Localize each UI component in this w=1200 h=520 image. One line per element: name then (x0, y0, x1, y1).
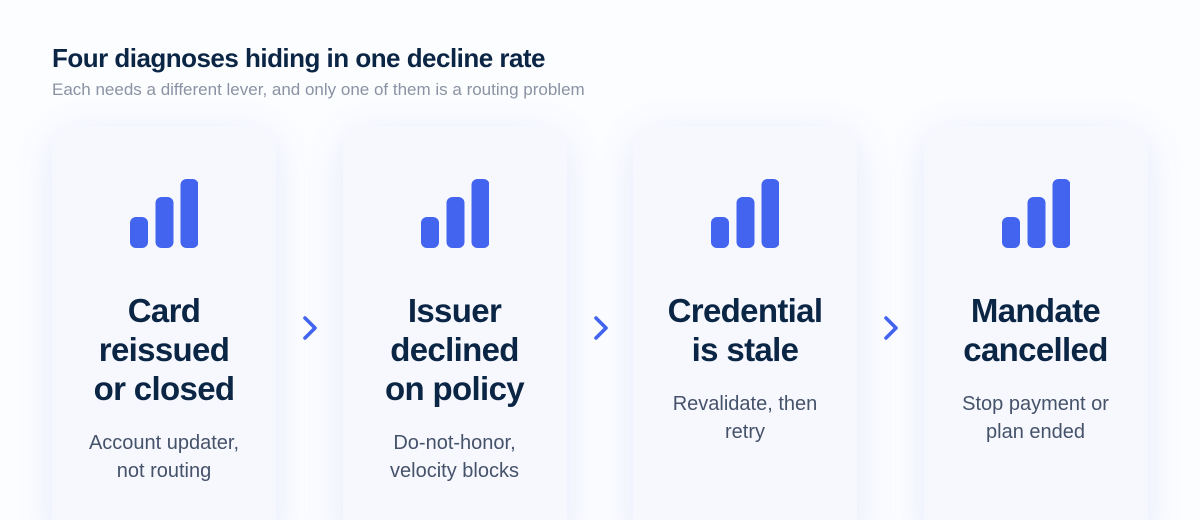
heading (668, 292, 822, 368)
heading: is stale (692, 331, 798, 368)
description: Revalidate, then (673, 392, 817, 414)
arrow (303, 316, 317, 340)
heading: cancelled (963, 331, 1108, 368)
description: velocity blocks (390, 460, 519, 482)
icon: signal bars (130, 179, 198, 248)
panel: mandate cancelled (924, 126, 1148, 520)
panel: card reissued or closed (52, 126, 276, 520)
heading (94, 292, 234, 407)
heading: or closed (94, 370, 234, 407)
heading: Mandate (971, 292, 1100, 329)
panel: credential is stale (633, 126, 857, 520)
description: plan ended (986, 421, 1085, 443)
description: retry (725, 421, 765, 443)
arrow (884, 316, 898, 340)
heading: Issuer (408, 292, 501, 329)
heading (385, 292, 524, 407)
icon: signal bars (421, 179, 489, 248)
heading: declined (390, 331, 519, 368)
subtitle: Each needs a different lever, and only one of them is a routing problem (52, 80, 585, 98)
arrow (594, 316, 608, 340)
heading (963, 292, 1108, 368)
icon: signal bars (1002, 179, 1070, 248)
description (673, 392, 817, 443)
description (89, 432, 239, 482)
description: not routing (117, 460, 211, 482)
heading: Card (128, 292, 200, 329)
description: Do-not-honor, (393, 432, 516, 454)
description: Account updater, (89, 432, 239, 454)
panel: issuer declined on policy (342, 126, 566, 520)
icon: signal bars (711, 179, 779, 248)
heading: Credential (668, 292, 822, 329)
description: Stop payment or (962, 392, 1109, 414)
description (390, 432, 519, 482)
heading: on policy (385, 370, 524, 407)
title: Four diagnoses hiding in one decline rate (52, 43, 545, 73)
description (962, 392, 1109, 443)
heading: reissued (99, 331, 229, 368)
